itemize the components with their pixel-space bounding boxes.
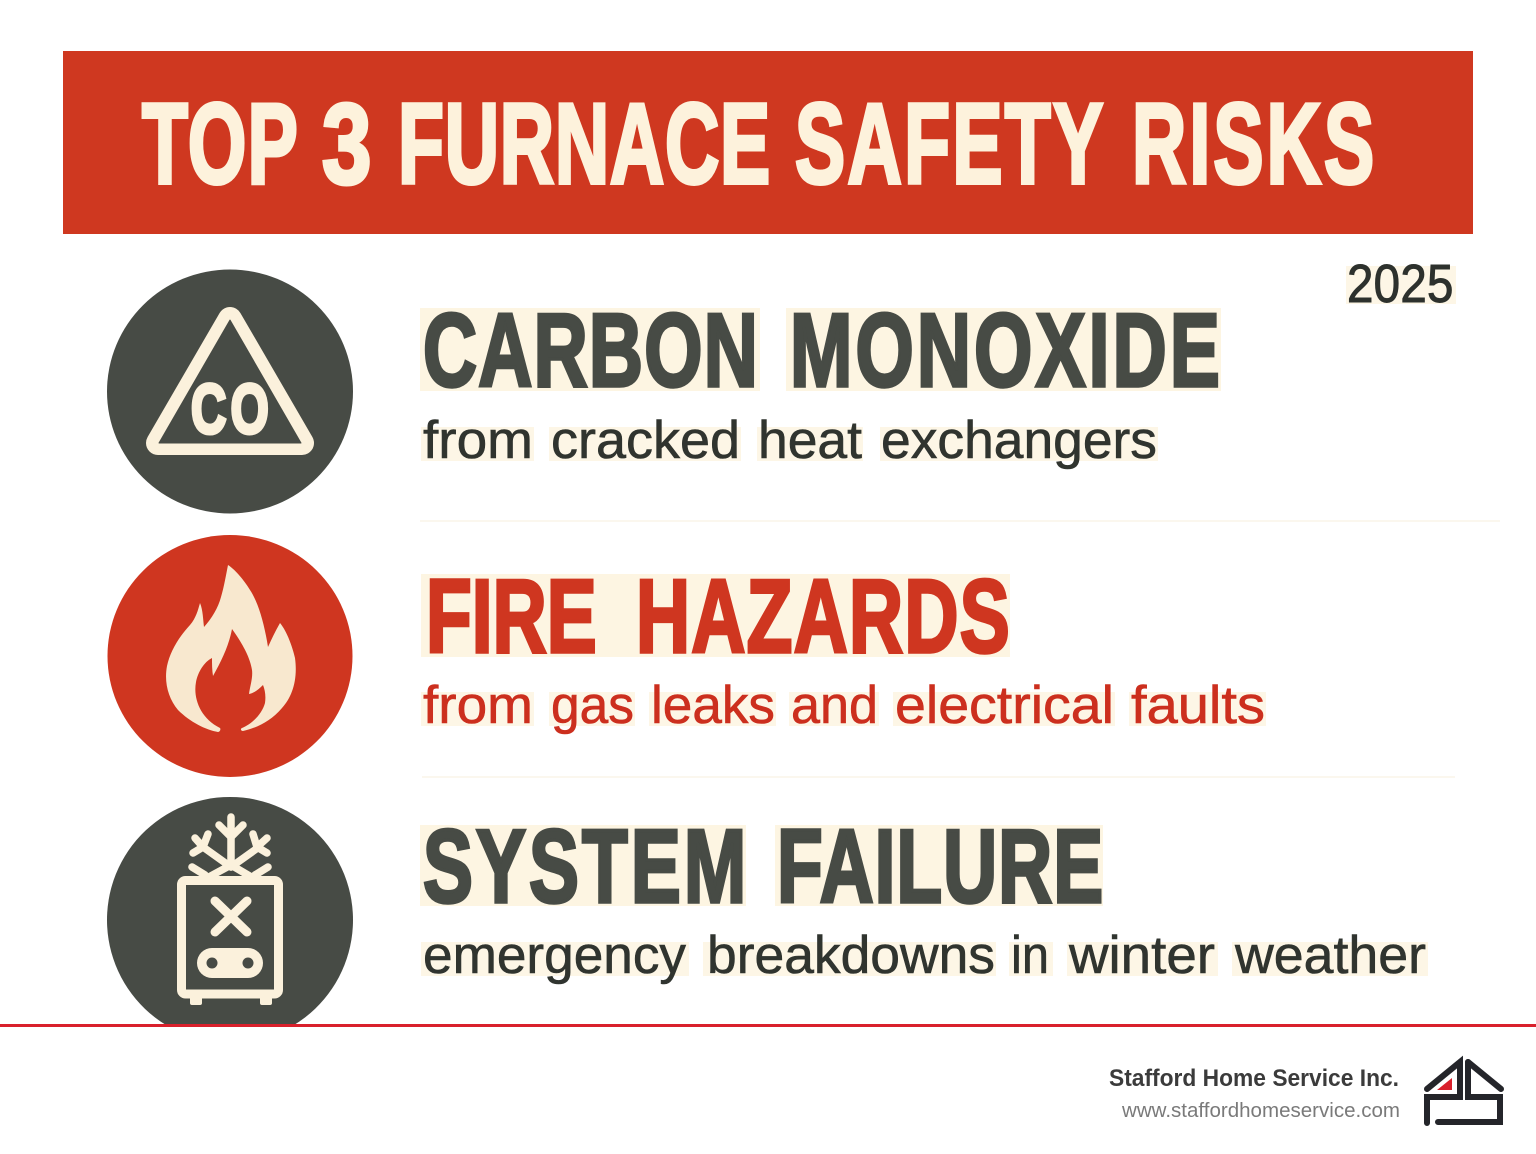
snowflake — [192, 817, 268, 878]
heading: carbon monoxide — [423, 293, 1220, 409]
description: system failure: weather — [1234, 926, 1426, 985]
description: carbon monoxide: heat — [758, 411, 862, 470]
furnace body — [182, 880, 278, 994]
heading: system failure: FAILURE — [777, 809, 1103, 925]
icon: frozen furnace — [107, 797, 353, 1025]
x mark — [215, 901, 247, 932]
footer company name: Stafford Home Service Inc. — [1109, 1065, 1399, 1092]
icon: carbon monoxide warning — [107, 270, 353, 514]
description: system failure: winter — [1068, 926, 1215, 985]
title: TOP — [142, 81, 298, 208]
description: system failure: emergency — [423, 926, 686, 985]
icon: carbon monoxide warning: CO — [191, 369, 269, 448]
description: carbon monoxide: cracked — [551, 411, 740, 470]
footer rule — [0, 1024, 1536, 1027]
title: FURNACE — [398, 81, 770, 208]
description: fire hazards: electrical — [895, 676, 1114, 735]
description: system failure: breakdowns — [707, 926, 995, 985]
risk 3: system failure — [420, 809, 1103, 925]
heading: fire hazards: FIRE — [426, 559, 597, 675]
title: SAFETY — [795, 81, 1103, 208]
description: fire hazards: leaks — [651, 676, 775, 735]
description: system failure: in — [1011, 926, 1049, 985]
description: fire hazards: from — [423, 676, 533, 735]
icon: flame — [108, 535, 352, 777]
description: fire hazards — [421, 676, 1266, 735]
heading: carbon monoxide: MONOXIDE — [790, 293, 1220, 409]
risk 1: carbon monoxide — [420, 293, 1221, 409]
description: fire hazards: faults — [1131, 676, 1265, 735]
description: carbon monoxide — [421, 411, 1158, 470]
heading: system failure: SYSTEM — [423, 809, 746, 925]
description: fire hazards: gas — [551, 676, 634, 735]
title — [142, 79, 1374, 208]
title banner — [63, 51, 1473, 234]
heading: system failure — [423, 809, 1103, 925]
description: carbon monoxide: exchangers — [881, 411, 1157, 470]
year label: 2025 — [1347, 253, 1453, 314]
risk 2: fire hazards — [421, 559, 1010, 675]
description: system failure — [421, 926, 1428, 985]
title: RISKS — [1132, 81, 1374, 208]
logo — [1427, 1062, 1501, 1123]
burner pill — [197, 948, 263, 978]
description: carbon monoxide: from — [423, 411, 533, 470]
heading: fire hazards: HAZARDS — [636, 559, 1010, 675]
title: 3 — [322, 79, 371, 208]
heading: carbon monoxide: CARBON — [423, 293, 758, 409]
description: fire hazards: and — [791, 676, 878, 735]
footer url: www.staffordhomeservice.com — [1121, 1100, 1400, 1122]
heading: fire hazards — [426, 559, 1010, 675]
